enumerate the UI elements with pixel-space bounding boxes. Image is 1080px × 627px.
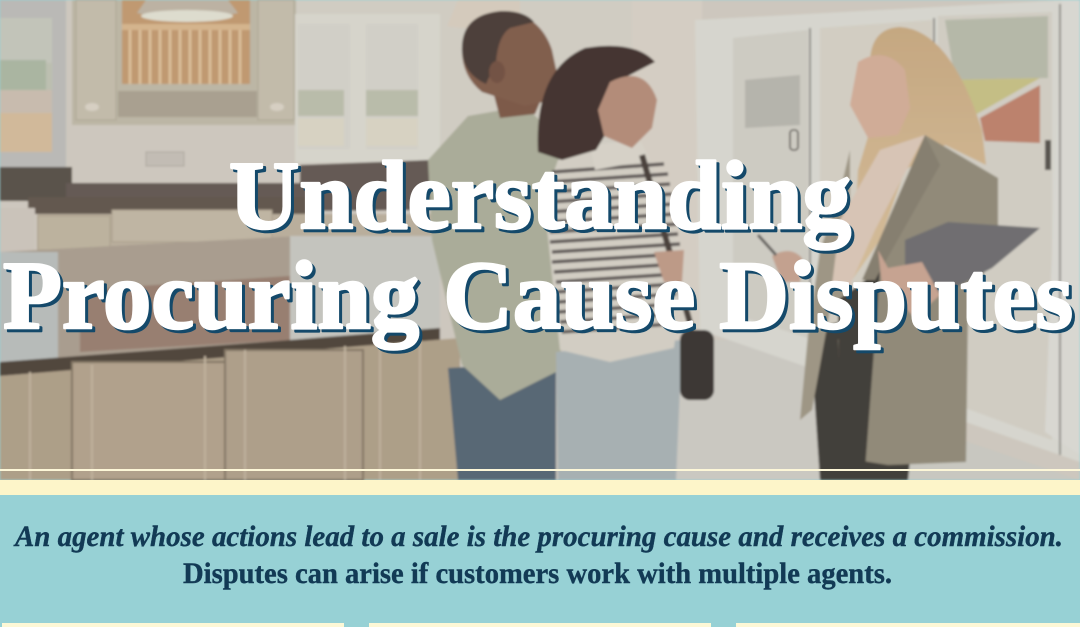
wall cabinet with plate rack xyxy=(72,0,296,125)
title line 2: Procuring Cause Disputes xyxy=(3,242,1073,349)
left window xyxy=(0,0,66,168)
woman in striped top xyxy=(538,46,714,480)
worktop and base cabinets xyxy=(0,160,437,254)
card 1 top xyxy=(2,623,344,627)
man in sage sweater xyxy=(428,11,566,480)
real estate agent with clipboard xyxy=(758,27,1040,480)
card 3 top xyxy=(736,623,1080,627)
title xyxy=(3,142,1073,349)
kitchen island xyxy=(0,236,460,480)
teal intro panel xyxy=(0,496,1080,627)
folding glass doors xyxy=(695,0,1080,462)
kitchen background wall xyxy=(0,0,1080,480)
hero photo: agent with couple in a kitchen xyxy=(0,0,1080,480)
socket xyxy=(146,152,184,166)
card tops xyxy=(2,623,1080,627)
intro sentence 1: An agent whose actions lead to a sale is the procuring cause and receives a commission. xyxy=(13,520,1063,553)
title line 1: Understanding xyxy=(229,142,851,249)
thin rule across the hero xyxy=(0,469,1080,471)
back windows xyxy=(295,14,440,162)
warm wash xyxy=(0,0,1080,480)
floor xyxy=(600,330,1080,480)
intro sentence 2: Disputes can arise if customers work with multiple agents. xyxy=(183,557,892,590)
pendant lamps xyxy=(136,0,238,24)
intro text xyxy=(13,520,1063,590)
cream band xyxy=(0,480,1080,495)
card 2 top xyxy=(369,623,711,627)
